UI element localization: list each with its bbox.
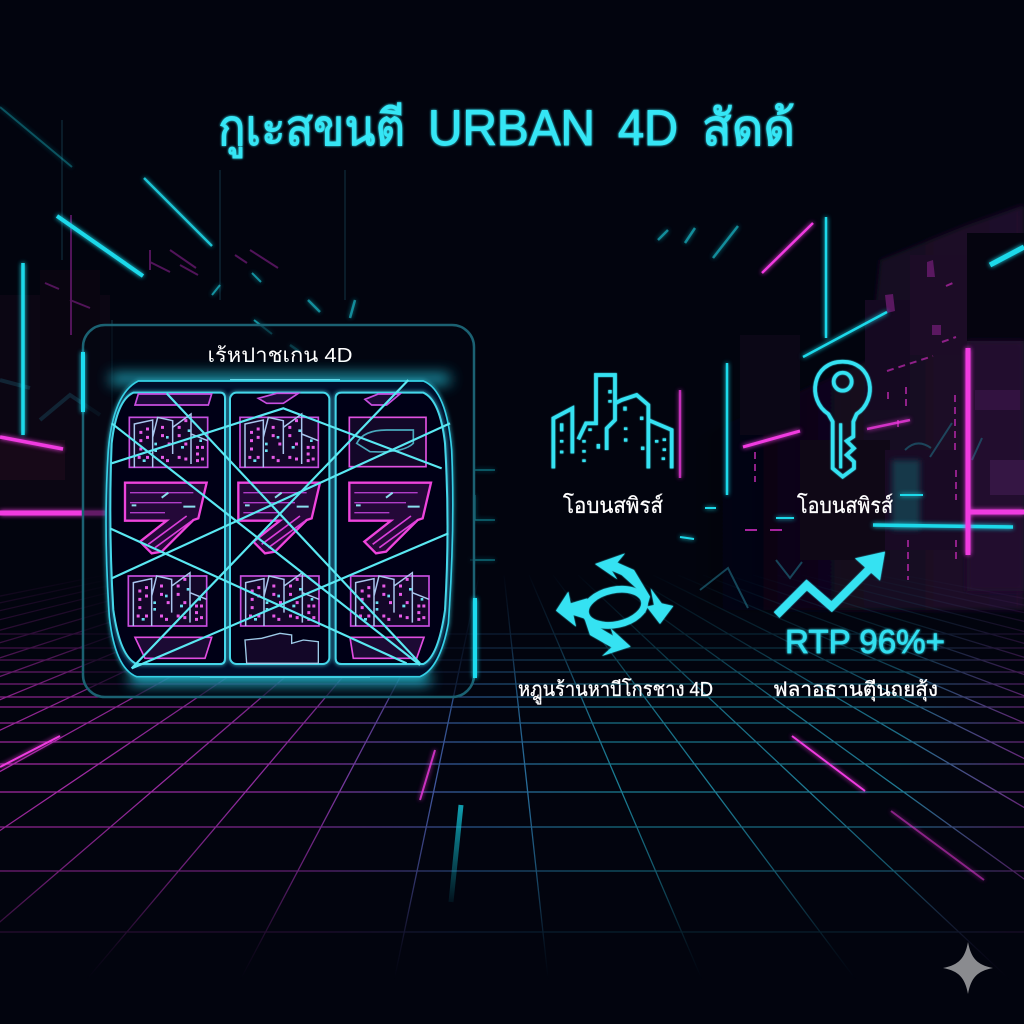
partial symbols top row [135, 393, 400, 405]
streak: cyan floor [451, 805, 461, 902]
title: สัดด้ [702, 100, 795, 156]
icon: key [815, 362, 870, 477]
slot frame accent bars [83, 352, 475, 678]
icon: city skyline [553, 375, 672, 468]
payline crossing lines [110, 380, 450, 668]
title: 4D [618, 100, 678, 156]
stat: RTP value: RTP 96%+ [785, 623, 945, 660]
background: neon streaks [0, 107, 1024, 902]
city symbols row one [129, 414, 426, 467]
slot heading: เร้หปาชเกน 4D [208, 345, 352, 367]
panel: slot machine [83, 325, 475, 697]
icon: rising trend arrow [777, 552, 885, 615]
background: right cyber buildings [690, 205, 1024, 610]
title: URBAN [428, 100, 595, 156]
streak group: magenta [0, 223, 1024, 880]
city symbols row three [128, 573, 429, 626]
streak group: cyan right [470, 217, 1024, 560]
label: RTP stat: ฟลาอธานตีุ่นถยสุ้ง [773, 679, 938, 702]
partial symbols bottom row [135, 637, 424, 658]
slot glow bars [110, 374, 450, 684]
streak group: cyan upper left [0, 107, 738, 435]
background: left cyber buildings [0, 120, 345, 515]
slot outer frame [83, 325, 474, 697]
seven symbols row two [125, 483, 431, 553]
background: floor perspective grid [0, 583, 1024, 964]
label: swirl icon: หฎูนร้านหาบีโกรชาง 4D [518, 678, 713, 706]
title: กูเะสขนตี [218, 100, 405, 158]
label: skyline icon: โอบนสพิรส์ [563, 493, 664, 518]
reels [106, 380, 453, 677]
icon: swirl arrows [556, 553, 673, 656]
label: key icon: โอบนสพิรส์ [797, 493, 894, 518]
barrel frame [106, 381, 453, 677]
icon: sparkle watermark [943, 942, 993, 994]
reel 3 [336, 393, 447, 664]
reel 2 [230, 393, 329, 664]
reel 1 [110, 393, 225, 664]
